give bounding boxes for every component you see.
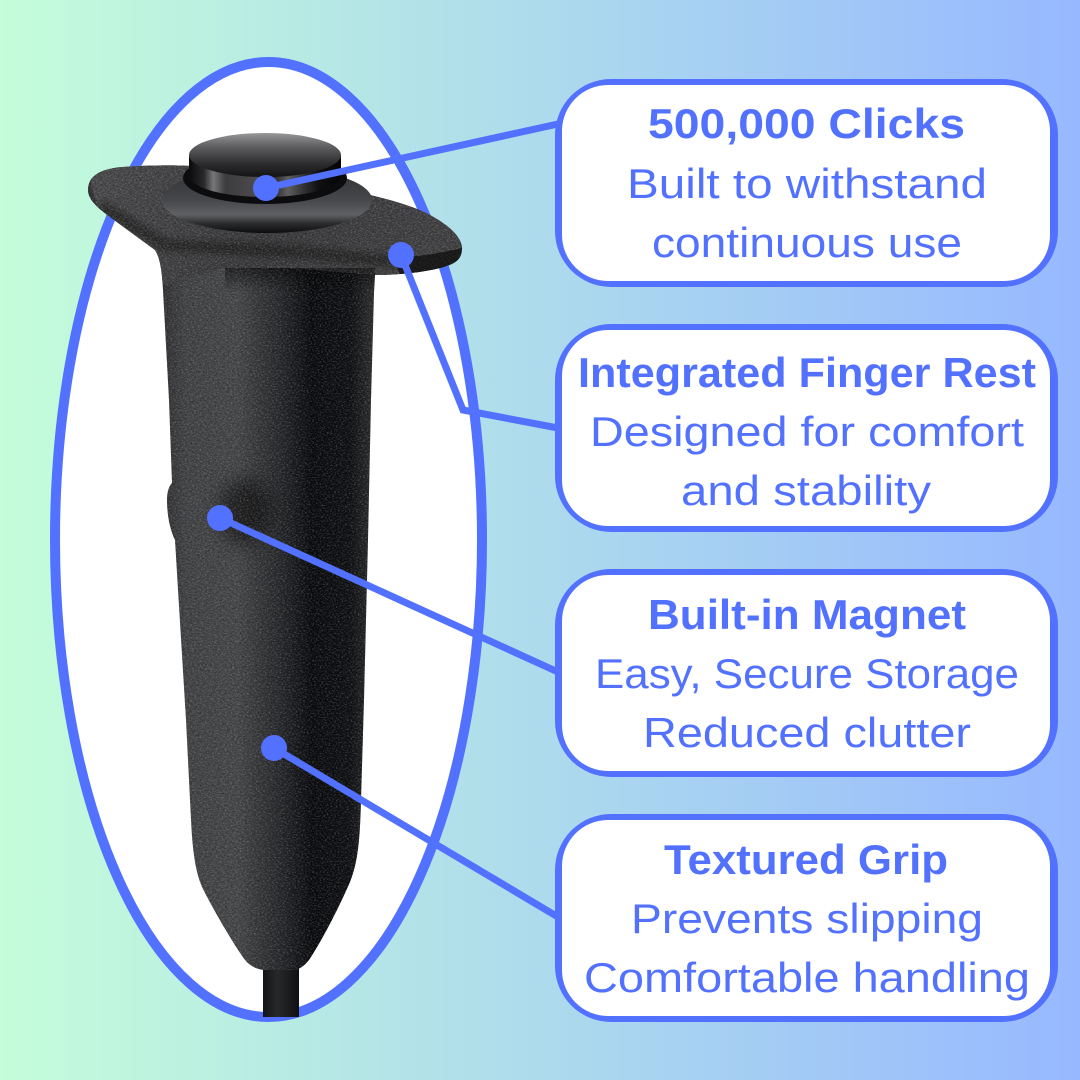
panel: Textured Grip (555, 814, 1058, 1022)
line: magnet (220, 518, 558, 672)
panel: Built-in Magnet (555, 569, 1058, 777)
button cap (189, 133, 341, 197)
line: finger rest (401, 255, 558, 428)
heading: 500,000 Clicks: 500,000 Clicks (648, 100, 965, 147)
heading: Built-in Magnet: Built-in Magnet (648, 591, 966, 638)
connector lines (220, 124, 558, 917)
line: grip (274, 748, 558, 917)
text: prevents slipping: Prevents slipping (631, 895, 983, 942)
text: comfortable handling: Comfortable handling (584, 954, 1030, 1001)
dot: grip (261, 735, 287, 761)
product: push button with textured handle (80, 133, 470, 1017)
panel: Integrated Finger Rest (555, 324, 1058, 532)
button collar ring (162, 167, 372, 233)
text: reduced clutter: Reduced clutter (643, 709, 971, 756)
line: clicks (266, 124, 558, 188)
text: and stability: and stability (681, 467, 931, 514)
button groove (183, 152, 347, 204)
dot: magnet (207, 505, 233, 531)
text: continuous use: continuous use (652, 219, 962, 266)
text: easy secure storage: Easy, Secure Storage (595, 650, 1019, 697)
textured handle body (80, 160, 470, 975)
panel: 500,000 Clicks (555, 79, 1058, 287)
heading: Integrated Finger Rest: Integrated Finger Rest (578, 349, 1036, 396)
text: designed for comfort: Designed for comfort (590, 408, 1024, 455)
oval product frame (55, 62, 482, 1017)
marker dots (207, 175, 414, 761)
cable (263, 965, 299, 1017)
dot: finger rest (388, 242, 414, 268)
heading: Textured Grip: Textured Grip (664, 836, 948, 883)
dot: button (253, 175, 279, 201)
text: built to withstand: Built to withstand (627, 160, 987, 207)
